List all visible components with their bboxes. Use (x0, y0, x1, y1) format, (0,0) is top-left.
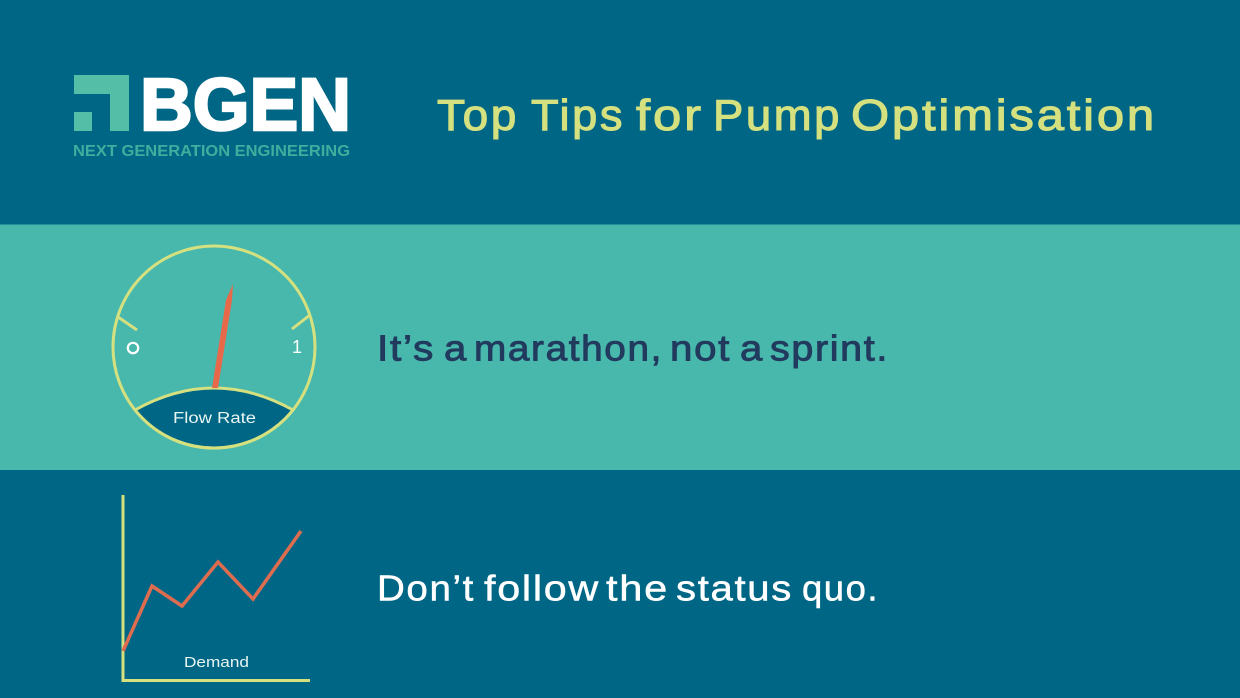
panel: tip 1 band (0, 224, 1240, 470)
tip 1 text: a (444, 328, 468, 368)
gauge ticks (118, 315, 310, 330)
chart line (123, 531, 301, 651)
logo: BGEN (73, 63, 351, 160)
chart caption: Demand (184, 655, 249, 671)
tip 1 text: not (670, 328, 731, 368)
title: for (636, 91, 704, 140)
tip 2 text: follow (484, 568, 600, 608)
panel: tip 2 band (0, 470, 1240, 698)
logo wordmark: BGEN (140, 63, 351, 146)
title: Pump (713, 91, 842, 140)
tip 2 text: the (606, 568, 669, 608)
tip 2 text: Don’t (377, 568, 475, 608)
panel: header band (0, 0, 1240, 224)
chart axes (123, 495, 310, 680)
tip 2 text: status (676, 568, 793, 608)
gauge needle (212, 284, 233, 388)
tip 2 text: quo. (802, 568, 879, 608)
gauge dial (113, 246, 315, 448)
title: Top (437, 91, 519, 140)
gauge one label: 1 (292, 337, 302, 357)
tip 1 text: sprint. (770, 328, 889, 368)
icon: flow rate gauge (113, 246, 315, 448)
title: Optimisation (851, 91, 1157, 140)
gauge label area (135, 388, 293, 448)
icon: logo square mark (74, 75, 129, 131)
title: Tips (531, 91, 625, 140)
gauge zero label (128, 343, 138, 353)
icon: demand chart (123, 495, 310, 680)
tip 1 text: a (740, 328, 764, 368)
gauge caption: Flow Rate (173, 410, 256, 427)
tip 1 text: It’s (377, 328, 435, 368)
logo tagline: NEXT GENERATION ENGINEERING (73, 143, 350, 160)
tip 1 text: marathon, (474, 328, 663, 368)
